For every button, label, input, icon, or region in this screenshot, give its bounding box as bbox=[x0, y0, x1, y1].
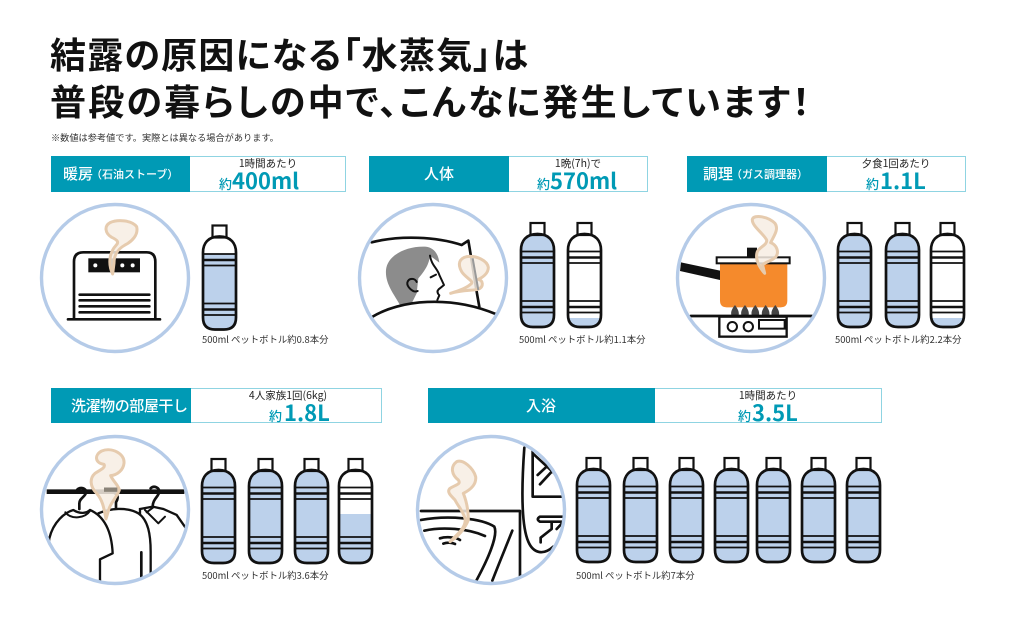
header: heating: （石油ストーブ） bbox=[91, 166, 178, 182]
header: bathing: 入浴 bbox=[526, 395, 556, 416]
header: laundry: 1.8L bbox=[284, 396, 330, 428]
header: heating: 約 bbox=[219, 174, 232, 193]
bottles bbox=[202, 459, 372, 563]
title: 結露の原因になる「水蒸気」は bbox=[50, 27, 528, 79]
header: cooking: 夕食1回あたり bbox=[862, 156, 930, 171]
header: heating bbox=[51, 156, 346, 196]
illustration: sleeping person bbox=[360, 204, 506, 357]
caption: 500ml ペットボトル約1.1本分 bbox=[519, 332, 646, 346]
title bbox=[50, 27, 810, 126]
header: laundry bbox=[51, 388, 382, 428]
header: human body: 1晩(7h)で bbox=[555, 156, 601, 171]
header: cooking: 1.1L bbox=[880, 164, 926, 196]
header: bathing bbox=[428, 388, 882, 428]
illustration: bathtub bbox=[418, 436, 564, 584]
footnote: ※数値は参考値です。実際とは異なる場合があります。 bbox=[51, 130, 279, 144]
header: human body bbox=[369, 156, 648, 196]
panel: heating bbox=[42, 156, 346, 352]
illustration: pot on gas stove bbox=[678, 204, 824, 352]
header: heating: 1時間あたり bbox=[239, 156, 297, 171]
header: bathing: 約 bbox=[738, 406, 751, 425]
panel: indoor laundry drying bbox=[42, 388, 382, 585]
caption: 500ml ペットボトル約0.8本分 bbox=[202, 332, 329, 346]
header: human body: 約 bbox=[537, 174, 550, 193]
header: bathing: 3.5L bbox=[752, 396, 798, 428]
panel: cooking bbox=[678, 156, 966, 352]
caption: 500ml ペットボトル約2.2本分 bbox=[835, 332, 962, 346]
illustration: hanging clothes bbox=[42, 436, 188, 585]
header: laundry: 約 bbox=[269, 406, 282, 425]
header: bathing: 1時間あたり bbox=[739, 388, 797, 403]
caption: 500ml ペットボトル約3.6本分 bbox=[202, 568, 329, 582]
caption: 500ml ペットボトル約7本分 bbox=[576, 568, 695, 582]
header: human body: 人体 bbox=[424, 163, 454, 184]
panel: bathing bbox=[418, 388, 882, 584]
title: 普段の暮らしの中で、こんなに発生しています！ bbox=[50, 74, 810, 126]
header: laundry: 洗濯物の部屋干し bbox=[71, 395, 188, 416]
bottles bbox=[521, 223, 601, 327]
bottle bbox=[203, 226, 236, 330]
header: laundry: 4人家族1回(6kg) bbox=[249, 388, 327, 403]
header: cooking: 約 bbox=[866, 174, 879, 193]
header: heating: 400ml bbox=[232, 164, 299, 196]
header: heating: 暖房 bbox=[63, 163, 93, 184]
bottles bbox=[577, 458, 880, 562]
header: cooking: （ガス調理器） bbox=[731, 166, 808, 182]
header: cooking: 調理 bbox=[703, 163, 733, 184]
panel: human body bbox=[360, 156, 648, 357]
illustration: oil stove with steam bbox=[42, 204, 188, 352]
bottles bbox=[838, 223, 964, 327]
header: human body: 570ml bbox=[550, 164, 617, 196]
header: cooking bbox=[687, 156, 966, 196]
